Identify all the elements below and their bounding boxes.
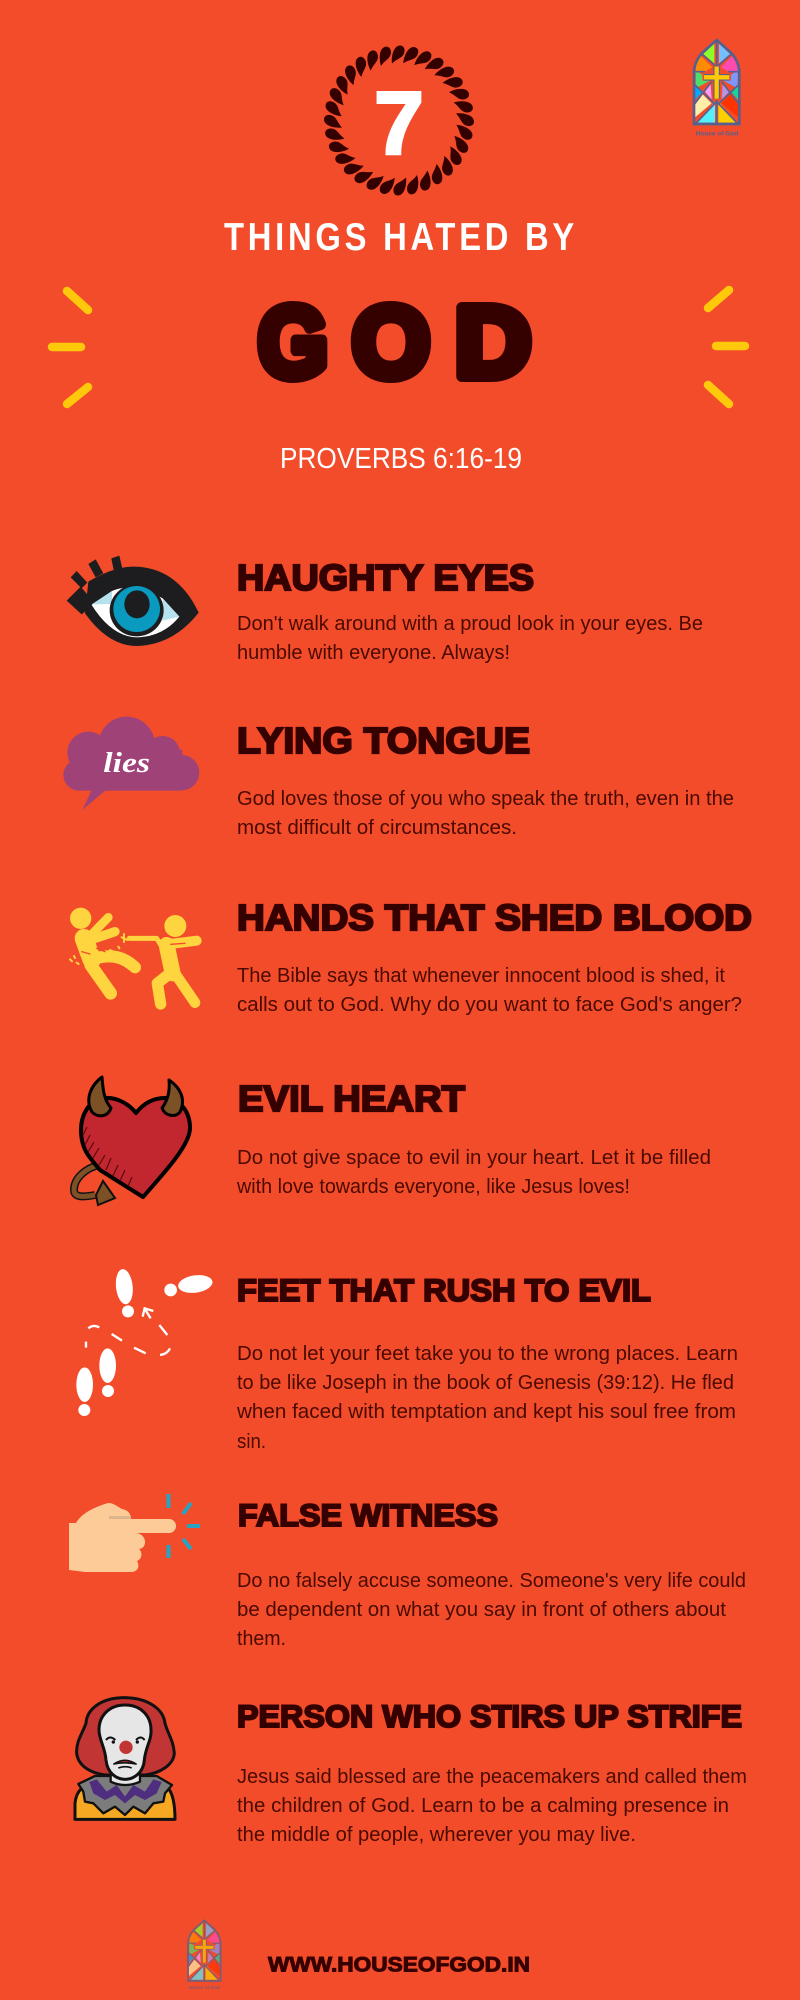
description <box>236 1342 738 1453</box>
icon: clown <box>75 1698 175 1819</box>
description: Do no falsely accuse someone. Someone's very life could <box>237 1569 746 1592</box>
panel: hands that shed blood <box>70 897 752 1016</box>
description <box>237 1765 747 1846</box>
heading: LYING TONGUE <box>237 720 530 761</box>
description <box>237 612 703 664</box>
heading: GOD: O <box>352 286 430 398</box>
heading: GOD: G <box>258 286 328 398</box>
heading: FEET THAT RUSH TO EVIL <box>237 1272 651 1308</box>
description: Do not give space to evil in your heart. Let it be filled <box>237 1146 711 1169</box>
panel: evil heart <box>74 1077 711 1205</box>
panel: haughty eyes <box>67 556 703 664</box>
description: The Bible says that whenever innocent blood is shed, it <box>237 964 725 987</box>
panel: lying tongue <box>63 717 734 839</box>
heading: PERSON WHO STIRS UP STRIFE <box>237 1698 742 1734</box>
icon: figure shooting another figure <box>70 908 197 1004</box>
description: with love towards everyone, like Jesus loves! <box>236 1175 630 1198</box>
heading: FALSE WITNESS <box>238 1497 498 1533</box>
logo: stained glass window footer <box>188 1920 221 1990</box>
icon: heart with horns and tail <box>74 1077 190 1205</box>
logo: stained glass window footer: House of God <box>189 1985 220 1990</box>
heading: HAUGHTY EYES <box>237 557 534 598</box>
description: Do not let your feet take you to the wrong places. Learn <box>237 1342 738 1365</box>
icon: speech cloud with lies: lies <box>103 748 150 779</box>
description: the middle of people, wherever you may live. <box>237 1823 636 1846</box>
heading: things hated by: THINGS HATED BY <box>224 214 574 259</box>
heading: EVIL HEART <box>238 1078 465 1119</box>
description <box>237 1569 746 1650</box>
icon: pointing hand <box>69 1494 200 1572</box>
number 7: 7 <box>374 73 424 173</box>
description: God loves those of you who speak the truth, even in the <box>237 787 734 810</box>
heading: HANDS THAT SHED BLOOD <box>237 897 752 938</box>
description: humble with everyone. Always! <box>237 641 510 664</box>
panel: feet that rush to evil <box>76 1268 738 1453</box>
description <box>237 787 734 839</box>
description <box>236 1146 711 1198</box>
panel: false witness <box>69 1494 746 1650</box>
icon: speech cloud with lies <box>63 717 199 810</box>
description: sin. <box>237 1430 266 1453</box>
icon: yellow rays right <box>708 290 745 404</box>
heading: GOD: D <box>455 286 531 398</box>
panel: person who stirs up strife <box>75 1698 747 1846</box>
description: Jesus said blessed are the peacemakers and called them <box>237 1765 747 1788</box>
description <box>237 964 742 1016</box>
icon: yellow rays left <box>52 291 88 404</box>
icon: ring of drops around the number 7 <box>324 46 474 196</box>
description: when faced with temptation and kept his soul free from <box>236 1400 736 1423</box>
icon: footprints with dashed path <box>76 1268 214 1416</box>
description: most difficult of circumstances. <box>237 816 517 839</box>
description: them. <box>237 1627 286 1650</box>
footer website address: WWW.HOUSEOFGOD.IN <box>268 1954 530 1976</box>
icon: eye <box>67 556 199 646</box>
description: be dependent on what you say in front of others about <box>237 1598 726 1621</box>
description: calls out to God. Why do you want to face God's anger? <box>237 993 742 1016</box>
description: the children of God. Learn to be a calming presence in <box>237 1794 729 1817</box>
heading: GOD <box>258 286 531 398</box>
subtitle: proverbs reference: PROVERBS 6:16-19 <box>280 443 522 475</box>
description: to be like Joseph in the book of Genesis (39:12). He fled <box>237 1371 734 1394</box>
description: Don't walk around with a proud look in your eyes. Be <box>237 612 703 635</box>
logo: stained glass window top right <box>694 40 739 137</box>
logo: stained glass window top right: House of God <box>696 131 739 137</box>
